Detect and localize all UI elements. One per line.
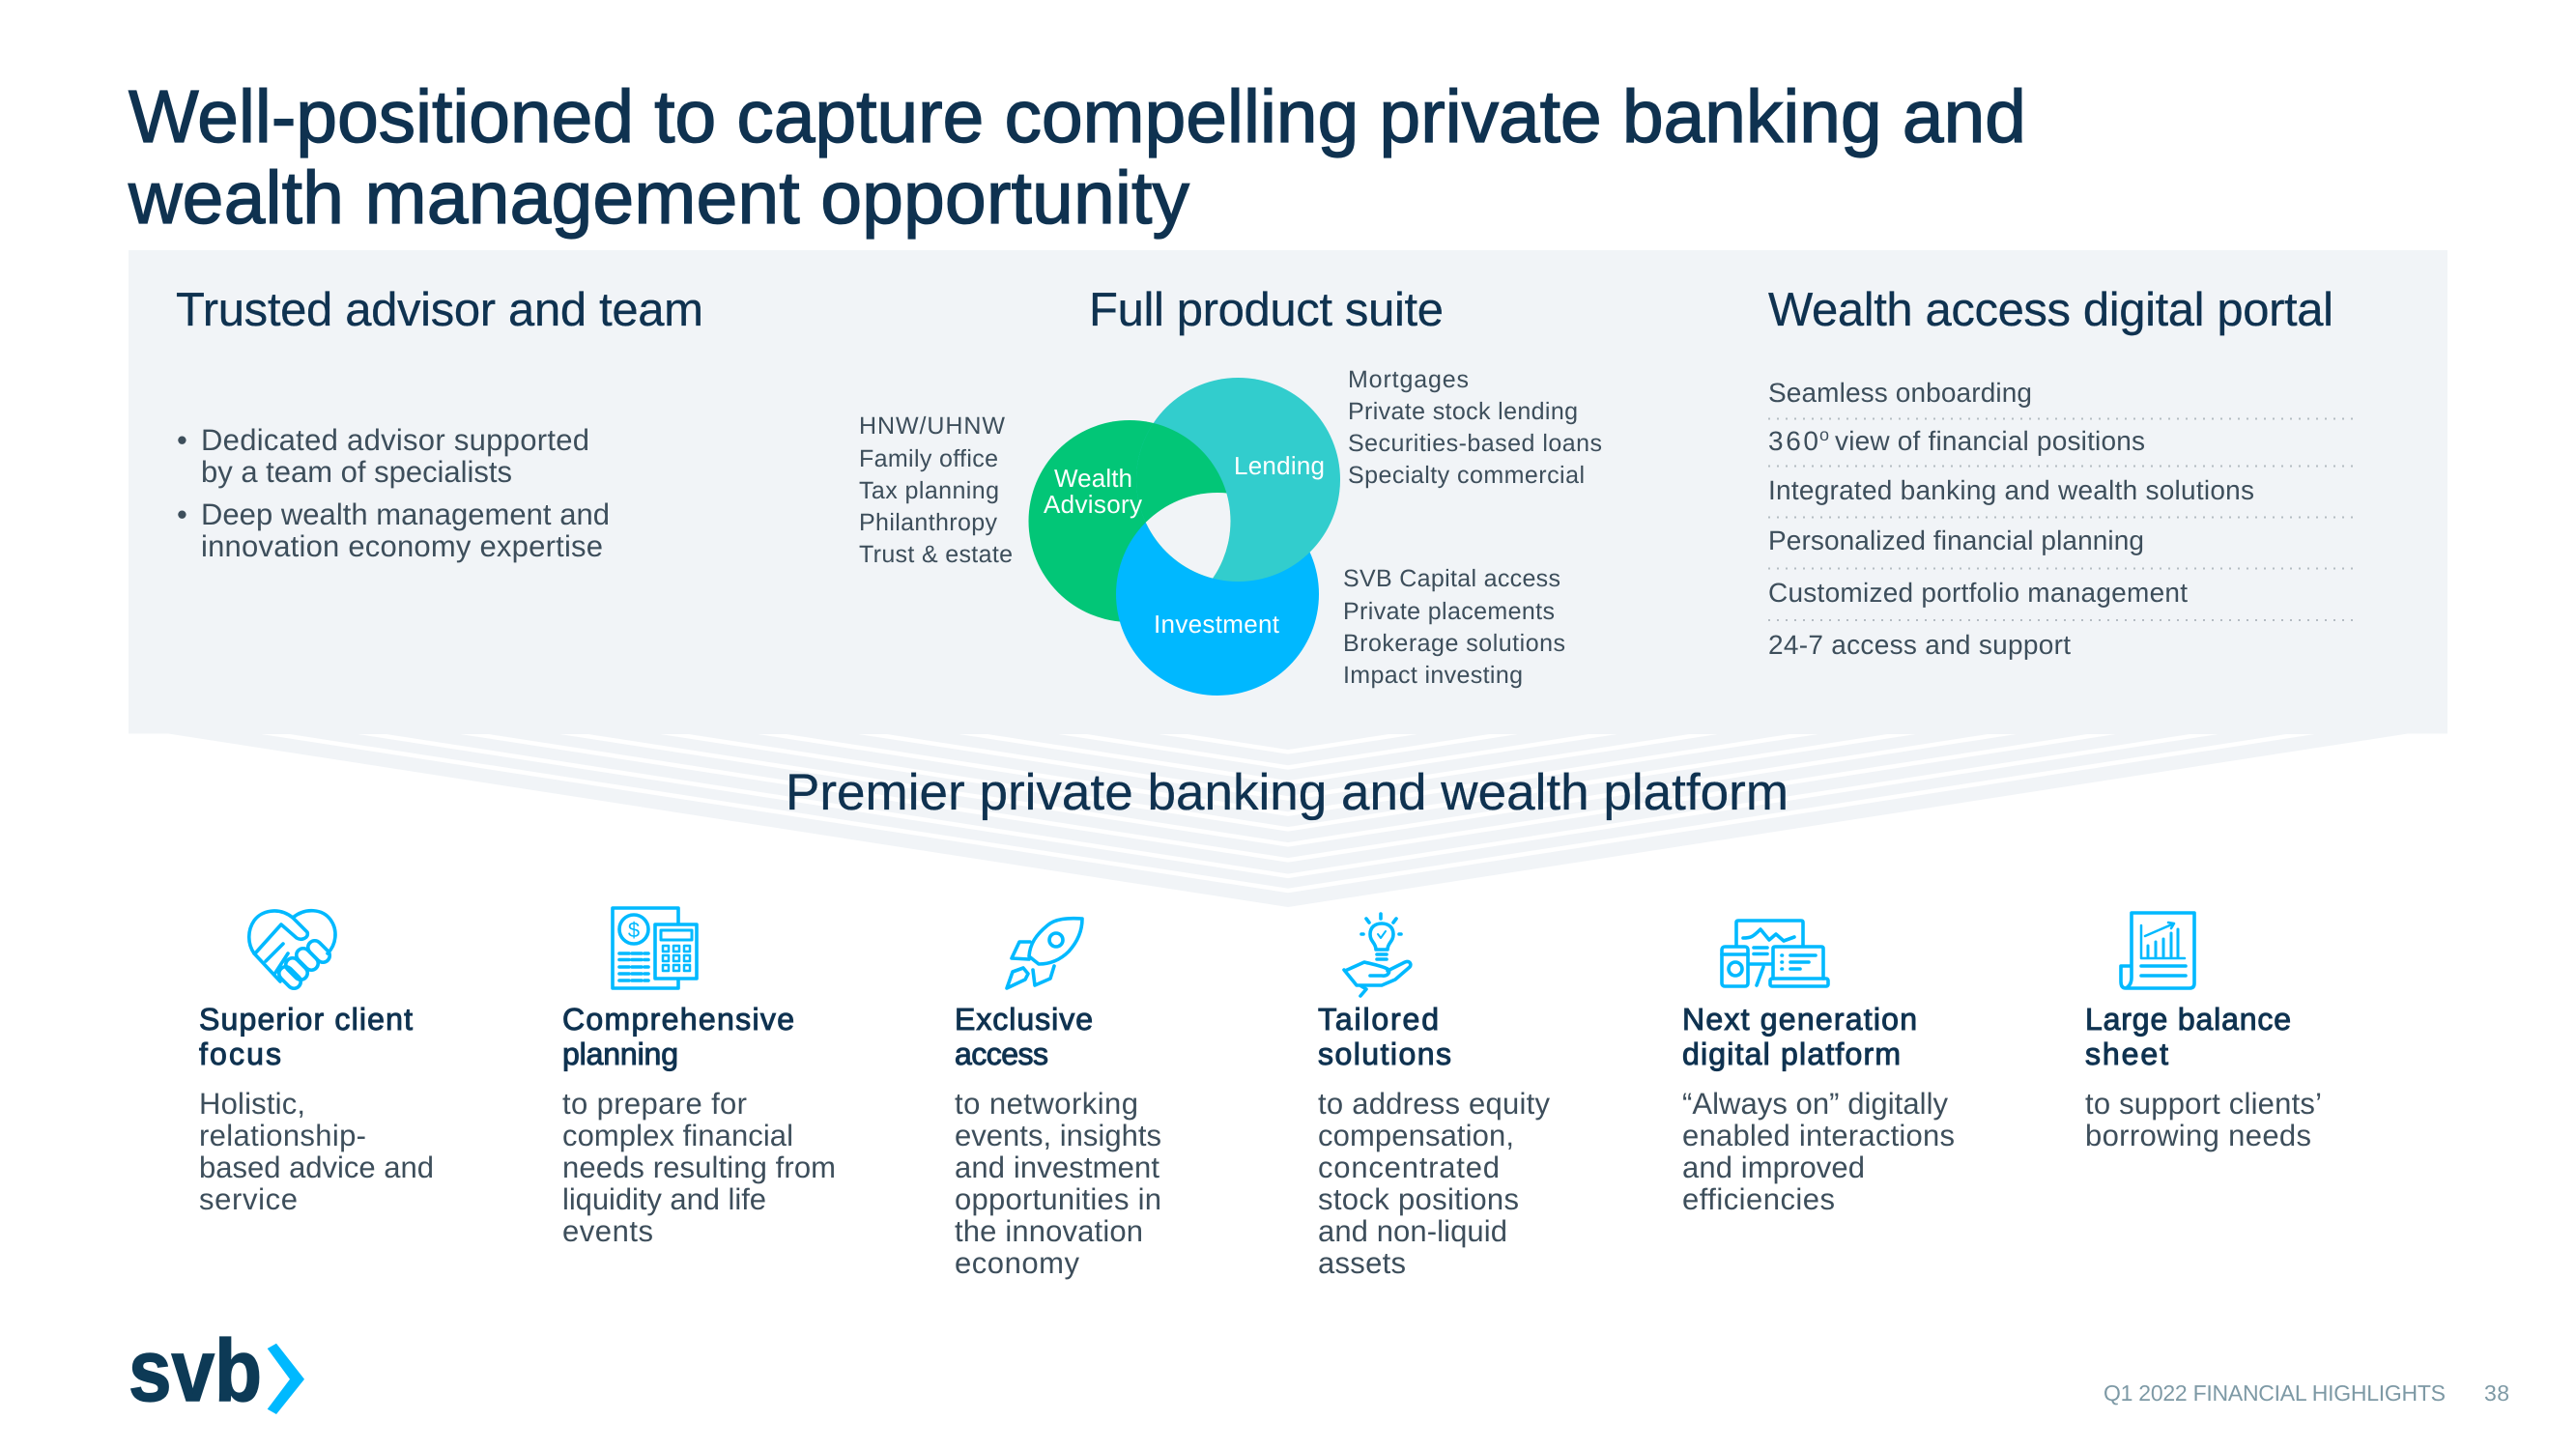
description	[562, 1087, 836, 1248]
text block: lending services: Mortgages	[1348, 366, 1469, 393]
description: to networking	[955, 1087, 1138, 1121]
column: large balance sheet	[2085, 913, 2322, 1152]
heading: Comprehensive	[562, 1002, 794, 1037]
heading	[1682, 1002, 1917, 1071]
text block: trusted advisor bullets: •	[177, 497, 187, 531]
text block: lending services: Specialty commercial	[1348, 462, 1585, 489]
description: to prepare for	[562, 1087, 747, 1121]
heading: solutions	[1318, 1037, 1451, 1071]
text block: investment services	[1343, 565, 1565, 689]
wealth over lending overlap	[1136, 423, 1231, 579]
icon: rocket	[1007, 919, 1082, 988]
description: events	[562, 1214, 653, 1248]
heading: planning	[562, 1037, 678, 1071]
description: to address equity	[1318, 1087, 1550, 1121]
logo: svb: svb	[129, 1322, 262, 1420]
icon: light bulb over hand	[1344, 914, 1411, 996]
description	[1682, 1087, 1955, 1216]
investment circle	[1116, 493, 1319, 696]
description: and investment	[955, 1151, 1159, 1184]
text block: lending services: Securities-based loans	[1348, 430, 1602, 457]
list: digital portal features: Customized portfolio management	[1768, 578, 2188, 608]
description	[955, 1087, 1161, 1280]
heading: Exclusive	[955, 1002, 1093, 1037]
text block: trusted advisor bullets: Deep wealth management and	[201, 497, 610, 531]
text block: trusted advisor bullets	[177, 423, 610, 563]
description: needs resulting from	[562, 1151, 836, 1184]
footer: section label and page number: 38	[2484, 1380, 2509, 1406]
text block: trusted advisor bullets: •	[177, 423, 187, 457]
description: based advice and	[199, 1151, 434, 1184]
label: wealth advisory: Wealth	[1054, 464, 1132, 493]
column: comprehensive planning	[562, 908, 836, 1248]
list: digital portal features: o	[1819, 425, 1829, 444]
heading: focus	[199, 1037, 281, 1071]
icon: report with bar chart	[2121, 913, 2194, 988]
description: efficiencies	[1682, 1182, 1835, 1216]
column: exclusive access	[955, 919, 1161, 1280]
centre cut-out	[1146, 493, 1231, 579]
description: Holistic,	[199, 1087, 305, 1121]
description: service	[199, 1182, 298, 1216]
column: next generation digital platform	[1682, 921, 1955, 1216]
label: lending: Lending	[1234, 451, 1325, 480]
text block: trusted advisor bullets: innovation economy expertise	[201, 529, 603, 563]
text block: wealth advisory services	[859, 412, 1013, 568]
description: concentrated	[1318, 1151, 1500, 1184]
list: digital portal features	[1768, 378, 2355, 660]
text block: lending services: Private stock lending	[1348, 398, 1578, 425]
description: assets	[1318, 1246, 1406, 1280]
description: the innovation	[955, 1214, 1143, 1248]
chart: three-circle product venn diagram	[1028, 378, 1340, 696]
heading	[199, 1002, 413, 1071]
panel: light background with funnel chevron	[129, 250, 2447, 907]
heading	[955, 1002, 1093, 1071]
heading: sheet	[2085, 1037, 2168, 1071]
icon: document and calculator	[613, 908, 697, 988]
text block: wealth advisory services: Trust & estate	[859, 541, 1013, 568]
text block: investment services: Private placements	[1343, 598, 1555, 625]
description: economy	[955, 1246, 1080, 1280]
description: enabled interactions	[1682, 1119, 1955, 1152]
text block: investment services: Brokerage solutions	[1343, 630, 1565, 657]
lending circle	[1136, 378, 1340, 582]
label: investment: Investment	[1154, 610, 1280, 639]
list: digital portal features: 24-7 access and support	[1768, 630, 2071, 660]
description: “Always on” digitally	[1682, 1087, 1948, 1121]
description: opportunities in	[955, 1182, 1161, 1216]
text block: trusted advisor bullets: by a team of specialists	[201, 455, 512, 489]
list: digital portal features: Personalized financial planning	[1768, 526, 2144, 555]
list: digital portal features: view of financial positions	[1835, 426, 2145, 456]
heading: wealth access digital portal: Wealth access digital portal	[1768, 284, 2333, 336]
heading: premier platform: Premier private banking and wealth platform	[786, 764, 1789, 821]
text block: lending services	[1348, 366, 1602, 489]
title	[128, 75, 2026, 240]
description: relationship-	[199, 1119, 366, 1152]
column: superior client focus	[199, 911, 434, 1216]
text block: trusted advisor bullets: Dedicated advisor supported	[201, 423, 589, 457]
text block: wealth advisory services: HNW/UHNW	[859, 412, 1005, 440]
description: and non-liquid	[1318, 1214, 1507, 1248]
heading	[1318, 1002, 1451, 1071]
heading: Large balance	[2085, 1002, 2291, 1037]
heading	[2085, 1002, 2291, 1071]
heading: access	[955, 1037, 1048, 1071]
heading: Tailored	[1318, 1002, 1439, 1037]
icon: heart handshake	[249, 911, 335, 991]
text block: investment services: Impact investing	[1343, 662, 1523, 689]
description	[1318, 1087, 1550, 1280]
description: liquidity and life	[562, 1182, 766, 1216]
description	[2085, 1087, 2322, 1152]
title: wealth management opportunity	[128, 156, 1190, 240]
icon: monitor, phone and laptop	[1722, 921, 1828, 986]
heading	[562, 1002, 794, 1071]
description: to support clients’	[2085, 1087, 2322, 1121]
heading: full product suite: Full product suite	[1089, 284, 1444, 336]
text block: wealth advisory services: Tax planning	[859, 477, 999, 504]
text block: wealth advisory services: Philanthropy	[859, 509, 997, 536]
text block: wealth advisory services: Family office	[859, 445, 998, 472]
heading: Next generation	[1682, 1002, 1917, 1037]
label: wealth advisory: Advisory	[1044, 490, 1142, 519]
description	[199, 1087, 434, 1216]
description: stock positions	[1318, 1182, 1519, 1216]
column: tailored solutions	[1318, 914, 1550, 1280]
description: events, insights	[955, 1119, 1161, 1152]
list: digital portal features: 360	[1768, 426, 1818, 456]
title: Well-positioned to capture compelling private banking and	[129, 75, 2026, 158]
text block: investment services: SVB Capital access	[1343, 565, 1560, 592]
description: compensation,	[1318, 1119, 1514, 1152]
heading: Superior client	[199, 1002, 413, 1037]
description: borrowing needs	[2085, 1119, 2311, 1152]
heading: digital platform	[1682, 1037, 1901, 1071]
heading: trusted advisor and team: Trusted advisor and team	[176, 284, 703, 336]
icon: document and calculator: $	[628, 918, 640, 942]
description: complex financial	[562, 1119, 793, 1152]
footer: section label and page number: Q1 2022 FINANCIAL HIGHLIGHTS	[2104, 1380, 2446, 1406]
list: digital portal features: Seamless onboarding	[1768, 378, 2032, 408]
wealth advisory circle	[1028, 420, 1231, 622]
description: and improved	[1682, 1151, 1865, 1184]
label: wealth advisory	[1044, 464, 1142, 519]
list: digital portal features: Integrated banking and wealth solutions	[1768, 475, 2254, 505]
